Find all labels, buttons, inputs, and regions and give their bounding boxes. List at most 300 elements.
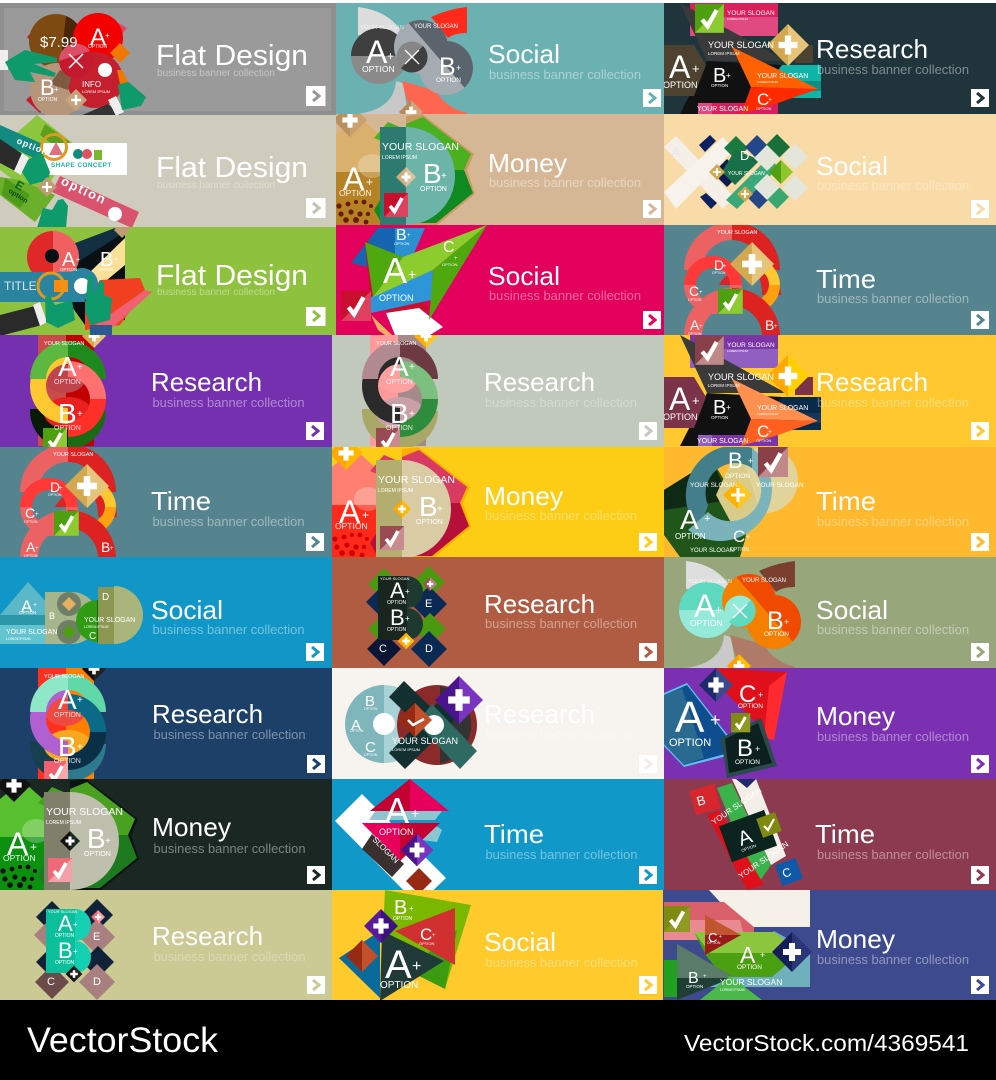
labels: ring art: + <box>746 534 750 541</box>
labels: ribbon art: option <box>15 136 50 157</box>
title: Social <box>151 595 223 625</box>
labels: ring art: C <box>733 527 745 546</box>
labels: arrows art: LOREM IPSUM <box>720 988 745 992</box>
labels: diamonds art: YOUR SLOGAN <box>48 909 77 914</box>
arrow button <box>306 86 326 106</box>
illustration: S-curve rings <box>30 668 106 779</box>
labels: ring art: + <box>35 512 39 518</box>
banner: Money yellow <box>329 436 664 559</box>
banner: Money purple <box>664 668 996 779</box>
labels: circles art: OPTION <box>690 618 723 628</box>
labels: triangles art: OPTION <box>379 293 414 303</box>
arrow button <box>306 643 324 661</box>
illustration: disc and crossed bars <box>345 676 483 769</box>
labels: star art: LOREM IPSUM <box>708 51 740 56</box>
labels: money art <box>3 806 123 863</box>
labels: triangles art: B <box>396 227 407 244</box>
labels: star art: YOUR SLOGAN <box>727 10 775 17</box>
title: Time <box>816 264 876 294</box>
labels: S art: A <box>58 351 77 382</box>
labels: money art: + <box>437 504 443 515</box>
title: Social <box>816 595 888 625</box>
arrow button <box>639 643 657 661</box>
labels: ring art: B <box>101 539 110 555</box>
subtitle: business banner collection <box>489 289 641 303</box>
labels: star art: LOREM IPSUM <box>708 383 740 388</box>
labels: star art: OPTION <box>663 80 698 90</box>
labels: star art: A <box>669 381 691 417</box>
labels: triangles art: OPTION <box>394 241 409 246</box>
illustration: triangle and half discs <box>0 582 143 644</box>
labels: triangles art: OPTION <box>419 941 434 946</box>
arrow button <box>971 866 989 884</box>
labels: ring art: OPTION <box>730 547 750 553</box>
labels: disc art: A <box>351 717 361 734</box>
labels: triangles art <box>379 227 458 303</box>
labels: money art <box>339 141 459 198</box>
labels: triangle art <box>6 592 135 642</box>
banner: Research navy <box>0 657 332 785</box>
labels: diamonds art: A <box>390 578 405 603</box>
labels: ring art: OPTION <box>675 532 706 541</box>
labels: ribbon art: option <box>59 173 109 207</box>
arrow button <box>306 198 326 218</box>
labels: circles art: YOUR SLOGAN <box>688 579 732 585</box>
arrow button <box>306 307 326 326</box>
labels: ring art: + <box>35 546 39 552</box>
labels: tiles art: OPTION <box>738 703 763 710</box>
illustration: tilted strips and tiles <box>689 779 803 890</box>
illustration: star arrow <box>663 3 821 114</box>
labels: diamonds art: + <box>405 614 410 623</box>
labels: cross art: YOUR SLOGAN <box>728 171 765 177</box>
labels: diamonds art <box>379 576 433 655</box>
title: Research <box>816 34 928 64</box>
labels: arrows art: A <box>740 942 756 968</box>
labels: circles art <box>688 578 789 638</box>
labels: diamonds art: OPTION <box>55 933 75 939</box>
subtitle: business banner collection <box>817 730 969 744</box>
labels: star art: B <box>713 397 726 419</box>
labels: disc art: LOREM IPSUM <box>392 747 420 752</box>
labels: money art: A <box>7 826 29 862</box>
labels: S art: YOUR SLOGAN <box>376 341 416 347</box>
labels: S art: B <box>58 398 77 429</box>
illustration: diamonds <box>366 566 447 667</box>
labels: triangles art <box>380 897 436 991</box>
labels: S art: OPTION <box>386 379 413 386</box>
labels: star art: YOUR SLOGAN <box>697 438 748 445</box>
labels: money art: B <box>423 158 442 189</box>
labels: money art: B <box>419 491 438 522</box>
labels: ribbon art: option <box>7 188 29 205</box>
labels: ring art: D <box>50 479 60 495</box>
labels: ribbon art: B <box>100 249 113 271</box>
labels: star art: OPTION <box>663 412 698 422</box>
labels: money art: OPTION <box>416 519 443 526</box>
labels: ring art: OPTION <box>712 271 726 275</box>
arrow button <box>971 89 989 107</box>
illustration: ring arcs <box>684 225 781 336</box>
banner: Social cream <box>664 114 996 225</box>
banner: Money indigo <box>663 890 996 1000</box>
labels: ring art: + <box>699 290 703 296</box>
labels: triangle art: C <box>89 631 96 642</box>
labels: cross art: D <box>740 148 749 163</box>
labels: diamonds art: A <box>58 911 73 936</box>
labels: ring art <box>24 452 114 558</box>
labels: ring art: YOUR SLOGAN <box>690 482 738 489</box>
labels: ribbon art: SHAPE CONCEPT <box>51 162 112 169</box>
banner: Research white <box>332 668 664 779</box>
labels: triangle art: D <box>102 592 109 603</box>
labels: star art: B <box>713 65 726 87</box>
labels: disc art: OPTION <box>364 753 378 757</box>
labels: banner 1 art: B <box>40 75 55 100</box>
labels: S art <box>44 674 84 765</box>
labels: triangles art: C <box>443 239 455 256</box>
labels: triangle art: YOUR SLOGAN <box>6 629 57 636</box>
arrow button <box>643 200 661 218</box>
labels: arrows art: + <box>719 934 722 940</box>
labels: diamonds art <box>47 909 101 988</box>
labels: banner 1 art: $7.99 <box>40 34 78 51</box>
labels: tiles art: C <box>739 681 756 708</box>
labels: ribbon art: OPTION <box>60 267 77 272</box>
labels: strip art: YOUR SLOGAN <box>737 839 790 881</box>
arrow button <box>639 533 657 551</box>
labels: ring art: + <box>699 324 703 330</box>
labels: arrows art: OPTION <box>707 941 721 945</box>
labels: money art: + <box>30 840 37 854</box>
labels: banner 1 art: + <box>54 85 59 94</box>
labels: circles art: A <box>366 34 388 70</box>
labels: money art: OPTION <box>420 186 447 193</box>
subtitle: business banner collection <box>154 728 306 742</box>
labels: triangles art: C <box>420 925 432 944</box>
subtitle: business banner collection <box>152 623 305 637</box>
subtitle: business banner collection <box>157 180 275 191</box>
labels: ring art: B <box>728 448 743 473</box>
labels: circles art: + <box>456 63 461 73</box>
labels: star art: + <box>726 403 731 412</box>
labels: disc art: B <box>365 693 375 710</box>
labels: triangles art: A <box>383 250 407 291</box>
banner: Money tan <box>333 103 664 226</box>
labels: star art: + <box>692 61 700 76</box>
labels: diamonds art: C <box>47 976 55 988</box>
labels: star art: YOUR SLOGAN <box>757 73 808 80</box>
labels: money art: B <box>87 823 106 854</box>
banner: Research purple <box>0 324 332 452</box>
illustration: title ribbon and hands <box>0 227 152 335</box>
labels: star art: C <box>757 422 769 441</box>
banner: Money dark <box>0 768 332 891</box>
labels: strip art: OPTION <box>741 843 757 853</box>
labels: star art: LOREM IPSUM <box>727 349 749 353</box>
labels: disc art: OPTION <box>350 729 364 733</box>
subtitle: business banner collection <box>154 950 306 964</box>
subtitle: business banner collection <box>486 728 638 742</box>
title: Research <box>484 589 595 619</box>
labels: star art <box>663 10 808 113</box>
labels: circles art: B <box>767 607 784 635</box>
banner: Social teal <box>336 3 664 124</box>
labels: strip art: YOUR SLOGAN <box>710 785 763 827</box>
illustration: money shapes <box>332 447 471 557</box>
labels: money art: OPTION <box>339 188 372 198</box>
labels: S art: + <box>77 742 83 753</box>
subtitle: business banner collection <box>157 287 275 298</box>
labels: banner 1 art: INFO <box>82 80 101 89</box>
banner: Time slate <box>664 222 996 336</box>
labels: circles art: B <box>439 53 456 81</box>
title: Research <box>152 699 263 729</box>
labels: money art: YOUR SLOGAN <box>46 806 123 818</box>
arrow button <box>971 533 989 551</box>
labels: banner 1 art: LOREM IPSUM <box>82 89 110 94</box>
labels: ribbon art: OPTION <box>98 267 113 272</box>
labels: triangles art: + <box>411 805 419 821</box>
labels: money art: A <box>339 494 361 530</box>
labels: tiles art <box>669 681 763 766</box>
banner: Research khaki <box>0 890 332 1000</box>
labels: tiles art: + <box>710 710 721 730</box>
arrow button <box>971 422 989 440</box>
illustration: diamonds <box>34 899 115 1000</box>
labels: triangles art: A <box>385 943 412 987</box>
labels: triangle art: LOREM IPSUM <box>6 637 31 641</box>
labels: ribbon art: A <box>62 249 76 271</box>
arrow button <box>971 311 989 329</box>
labels: ring art: OPTION <box>688 332 702 336</box>
labels: money art: + <box>105 836 111 847</box>
labels: arrows art: + <box>760 950 765 960</box>
labels: tiles art: + <box>755 744 760 754</box>
labels: ring art: + <box>704 513 710 525</box>
labels: diamonds art: E <box>93 931 100 943</box>
title: Research <box>484 367 595 397</box>
labels: arrows art <box>686 930 782 992</box>
labels: triangles art: + <box>454 256 458 262</box>
labels: star art: OPTION <box>756 106 771 111</box>
labels: circles art: + <box>387 49 394 63</box>
labels: disc art: C <box>365 739 376 756</box>
labels: diamonds art: YOUR SLOGAN <box>380 576 409 581</box>
banner: Social crimson <box>336 225 664 335</box>
title: Social <box>816 151 888 181</box>
arrow button <box>639 866 657 884</box>
labels: arrows art: OPTION <box>737 964 762 971</box>
labels: ring art: OPTION <box>24 554 38 558</box>
labels: star art: + <box>768 429 772 436</box>
labels: strip art: A <box>735 825 756 851</box>
labels: star art: LOREM IPSUM <box>727 17 749 21</box>
labels: banner 1 art <box>38 24 110 103</box>
labels: star art: + <box>692 393 700 408</box>
labels: ribbon art: TITLE <box>4 279 37 293</box>
labels: ring art: YOUR SLOGAN <box>690 548 734 554</box>
labels: ring art <box>675 448 804 554</box>
labels: money art: LOREM IPSUM <box>378 488 413 494</box>
labels: diamonds art: OPTION <box>387 600 407 606</box>
labels: banner 1 art: OPTION <box>38 97 58 103</box>
labels: money art: YOUR SLOGAN <box>382 141 459 153</box>
arrow button <box>971 643 989 661</box>
subtitle: business banner collection <box>817 953 969 967</box>
labels: money art: YOUR SLOGAN <box>378 474 455 486</box>
labels: diamonds art: C <box>379 643 387 655</box>
labels: star art: YOUR SLOGAN <box>757 405 808 412</box>
subtitle: business banner collection <box>485 509 637 523</box>
labels: triangle art: YOUR SLOGAN <box>84 617 135 624</box>
arrow button <box>307 976 325 994</box>
illustration: ribbons and lens <box>0 115 139 227</box>
labels: S art: B <box>58 731 77 762</box>
arrow button <box>307 755 325 773</box>
illustration: money shapes <box>336 114 475 225</box>
title: Flat Design <box>156 260 308 292</box>
labels: ring art: C <box>25 505 35 521</box>
labels: arrows art: C <box>708 930 717 945</box>
title: Social <box>488 39 560 69</box>
labels: diamonds art: OPTION <box>387 627 407 633</box>
labels: S art <box>376 341 416 432</box>
labels: money art: A <box>343 161 365 197</box>
illustration: money shapes <box>0 779 139 890</box>
banner: Time maroon <box>664 779 996 890</box>
labels: star art: + <box>726 71 731 80</box>
illustration: geometric triangles <box>341 225 487 335</box>
labels: S art: A <box>390 351 409 382</box>
labels: diamonds art: + <box>73 947 78 956</box>
banner: Research brown <box>332 557 664 668</box>
labels: S art: + <box>77 409 83 420</box>
labels: disc art <box>350 693 458 757</box>
subtitle: business banner collection <box>489 68 641 82</box>
labels: money art: + <box>366 175 373 189</box>
subtitle: business banner collection <box>817 292 969 306</box>
subtitle: business banner collection <box>817 63 969 77</box>
arrow button <box>643 89 661 107</box>
labels: circles art: OPTION <box>362 64 395 74</box>
labels: ring art: YOUR SLOGAN <box>53 452 93 458</box>
labels: money art: LOREM IPSUM <box>46 820 81 826</box>
labels: star art: C <box>757 90 769 109</box>
illustration: circles and hands <box>0 13 146 115</box>
labels: circles art: + <box>784 617 789 627</box>
labels: diamonds art: D <box>93 976 101 988</box>
subtitle: business banner collection <box>817 515 969 529</box>
labels: arrows art: OPTION <box>686 984 703 989</box>
labels: banner 1 art: OPTION <box>88 44 108 50</box>
labels: diamonds art: D <box>425 643 433 655</box>
labels: S art: OPTION <box>54 379 81 386</box>
labels: circles art: A <box>694 588 716 624</box>
title: Research <box>816 367 928 397</box>
subtitle: business banner collection <box>152 515 305 529</box>
title: Research <box>151 367 262 397</box>
title: Time <box>816 486 876 516</box>
labels: triangles art: + <box>408 266 416 282</box>
labels: star art: YOUR SLOGAN <box>727 342 775 349</box>
labels: diamonds art: + <box>73 920 78 929</box>
title: Time <box>484 819 544 849</box>
labels: triangles art: SLOGAN <box>371 835 401 865</box>
labels: circles art: OPTION <box>436 77 461 84</box>
labels: ring art: OPTION <box>688 298 702 302</box>
labels: tiles art: A <box>675 693 705 742</box>
title: Time <box>815 819 875 849</box>
banner: Research dark <box>663 3 996 114</box>
labels: triangle art: A <box>21 597 33 616</box>
subtitle: business banner collection <box>817 179 969 193</box>
labels: star art: OPTION <box>711 415 728 420</box>
title: Research <box>152 921 263 951</box>
labels: star art: OPTION <box>756 438 771 443</box>
labels: star art: YOUR SLOGAN <box>697 106 748 113</box>
labels: ring art: C <box>689 283 699 299</box>
illustration: S-curve rings <box>362 335 438 447</box>
illustration: overlapping circles <box>679 561 801 668</box>
banner: Research yellow <box>663 335 996 447</box>
labels: ring art: + <box>748 456 753 466</box>
labels: triangles art: + <box>412 958 421 975</box>
labels: cross art <box>671 144 765 177</box>
labels: ribbon art: + <box>114 257 118 264</box>
labels: arrows art: YOUR SLOGAN <box>720 977 782 987</box>
arrow button <box>971 200 989 218</box>
arrow button <box>639 976 657 994</box>
labels: money art: OPTION <box>3 853 36 863</box>
labels: tiles art: + <box>758 690 763 700</box>
subtitle: business banner collection <box>485 617 637 631</box>
labels: diamonds art: B <box>390 605 405 630</box>
labels: S art: A <box>58 684 77 715</box>
labels: strip art: C <box>780 865 793 881</box>
labels: S art: + <box>77 362 83 373</box>
title: Money <box>488 148 567 178</box>
labels: ribbon art: + <box>76 257 80 264</box>
banner: Flat Design beige <box>0 115 336 228</box>
subtitle: business banner collection <box>486 956 638 970</box>
labels: money art: LOREM IPSUM <box>382 155 417 161</box>
labels: circles art: YOUR SLOGAN <box>742 578 786 584</box>
title: Money <box>152 812 231 842</box>
labels: triangle art: + <box>33 602 37 609</box>
labels: money art: OPTION <box>84 851 111 858</box>
labels: strip art: B <box>695 792 707 809</box>
labels: ring art: OPTION <box>48 493 62 497</box>
illustration: star arrow <box>663 335 821 446</box>
title: Money <box>484 481 563 511</box>
labels: triangles art: B <box>394 897 407 919</box>
title: Research <box>484 699 595 729</box>
labels: ribbon art <box>7 136 112 207</box>
labels: triangles art: OPTION <box>380 980 418 991</box>
title: Social <box>488 261 560 291</box>
labels: triangles art <box>371 790 419 865</box>
banner: Social amber <box>332 890 664 1001</box>
labels: triangles art: + <box>407 233 411 239</box>
labels: S art: B <box>390 398 409 429</box>
labels: ring art: + <box>59 486 63 492</box>
labels: disc art: YOUR SLOGAN <box>392 736 458 746</box>
labels: triangles art: A <box>385 790 409 831</box>
labels: S art: + <box>409 362 415 373</box>
labels: tiles art: OPTION <box>669 737 711 749</box>
labels: S art: YOUR SLOGAN <box>44 341 84 347</box>
